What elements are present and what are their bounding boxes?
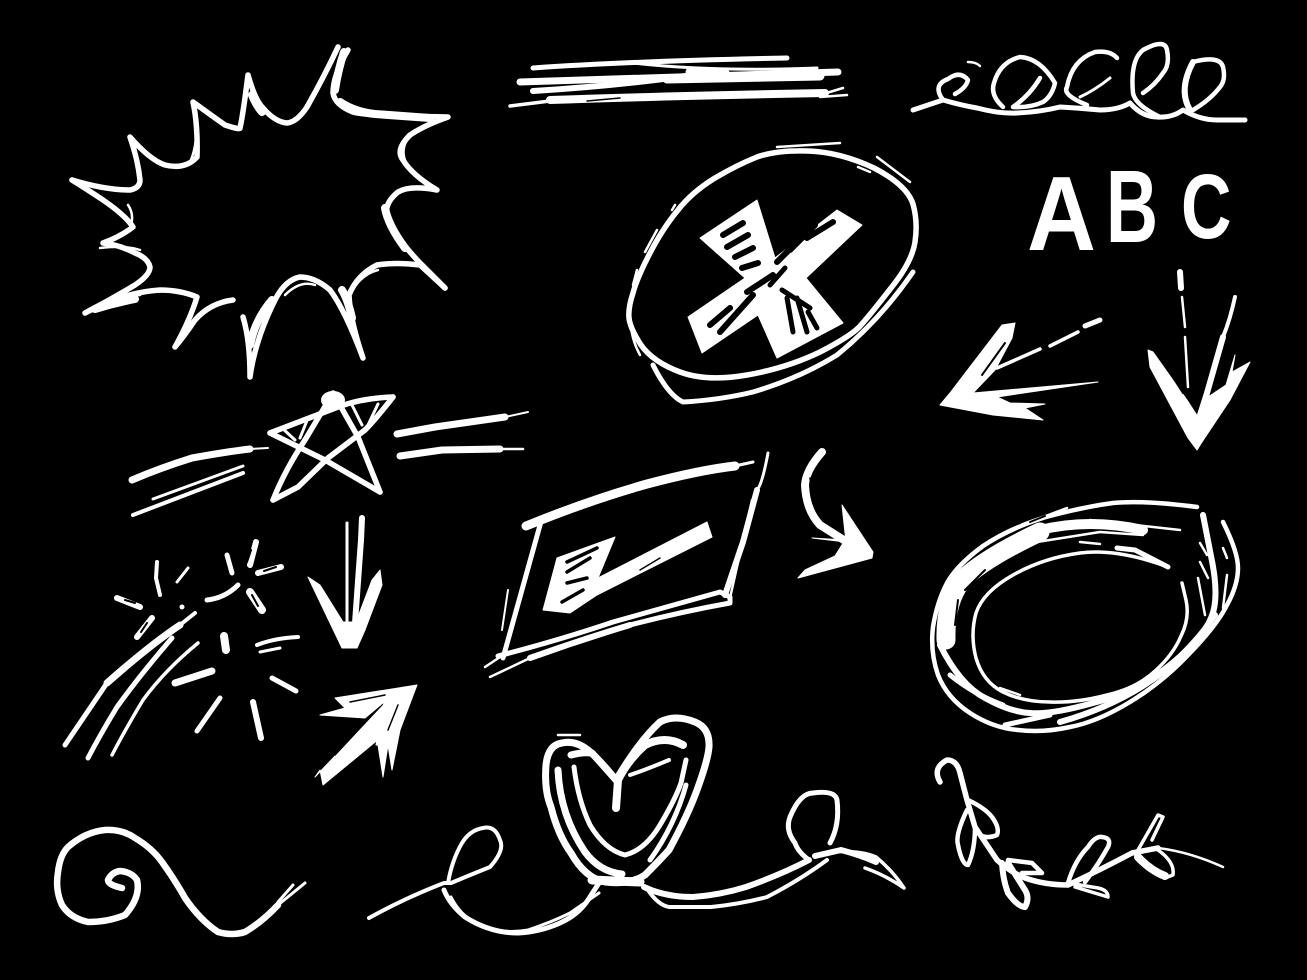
icon: leafy branch	[937, 760, 1223, 907]
arrow: pointing down	[1148, 272, 1250, 450]
hand-drawn oval	[629, 143, 916, 402]
arrow: small down	[308, 518, 382, 648]
icon: star with speed lines	[132, 391, 528, 515]
icon: spiral swirl	[57, 830, 305, 934]
text: ABC: C	[1181, 156, 1231, 258]
text: ABC: A	[1027, 155, 1096, 273]
X mark	[688, 200, 862, 358]
icon: checkbox with tick	[485, 453, 768, 677]
text: ABC: B	[1106, 149, 1158, 264]
icon: loop scribble	[913, 44, 1245, 120]
arrow: up right	[315, 685, 417, 785]
icon: sparkle burst with comet lines	[65, 542, 298, 758]
arrow: curved down right	[798, 452, 873, 578]
icon: speech burst	[72, 47, 448, 377]
arrow: pointing left	[940, 320, 1100, 420]
icon: scribbled oval	[932, 502, 1238, 731]
icon: heart with looped flourish	[369, 718, 904, 933]
icon: underline scribble strokes	[510, 58, 847, 106]
icon: circled X	[629, 143, 916, 402]
text: ABC	[1027, 149, 1231, 273]
